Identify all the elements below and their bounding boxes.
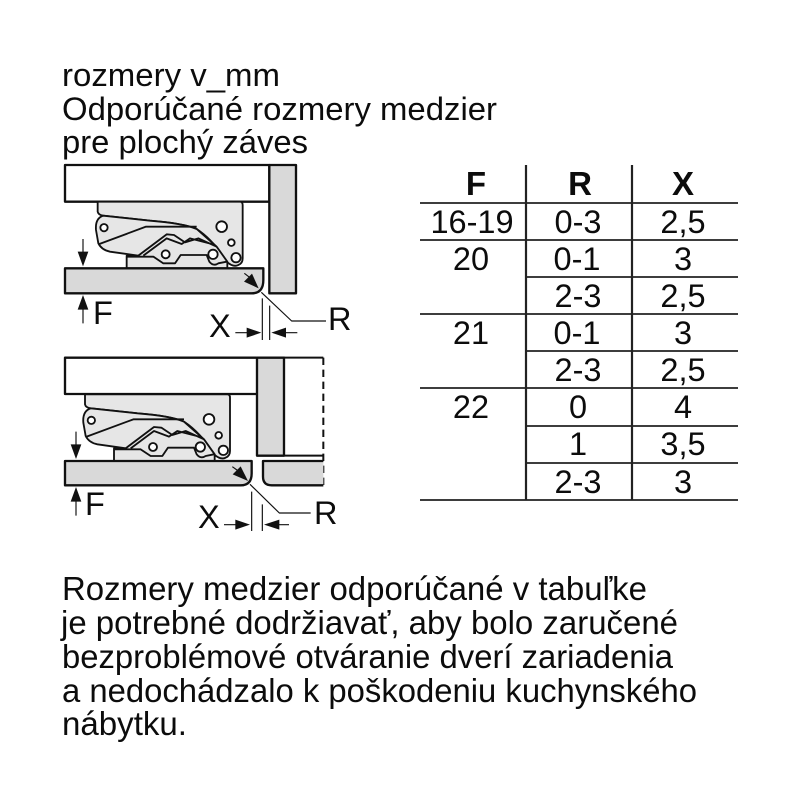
column R: 2-3 (555, 352, 601, 388)
dashed neighbour (284, 358, 323, 456)
door (65, 268, 263, 293)
table header: X (672, 165, 694, 202)
cabinet top (65, 358, 257, 394)
table header: R (568, 165, 592, 202)
column F: 20 (453, 241, 489, 277)
hinge (83, 394, 230, 461)
X dimension (224, 492, 289, 531)
column X: 2,5 (660, 278, 706, 314)
column F: 16-19 (430, 204, 514, 240)
column R: 0-1 (554, 241, 600, 277)
column R (554, 204, 601, 500)
label R: R (328, 301, 351, 337)
note text: nábytku. (62, 705, 187, 742)
column X: 4 (674, 389, 692, 425)
note text: bezproblémové otváranie dverí zariadenia (62, 638, 674, 675)
column R: 0-3 (555, 204, 601, 240)
diagram: flat hinge with side panel (65, 165, 326, 340)
note text: a nedochádzalo k poškodeniu kuchynského (62, 672, 697, 709)
neighbouring door (263, 461, 323, 485)
hinge (96, 202, 243, 268)
column R: 2-3 (555, 464, 601, 500)
column F: 22 (453, 389, 489, 425)
column X: 3 (674, 241, 692, 277)
label X: X (209, 308, 231, 344)
dimension table (420, 165, 738, 500)
heading (62, 57, 497, 160)
column X: 3 (674, 464, 692, 500)
table header (466, 165, 694, 202)
note text: Rozmery medzier odporúčané v tabuľke (62, 570, 647, 607)
note text: je potrebné dodržiavať, aby bolo zaručené (60, 604, 678, 641)
label F: F (93, 295, 113, 331)
column X: 3,5 (660, 426, 706, 462)
diagram: flat hinge with adjacent door (65, 358, 323, 531)
R leader (244, 273, 326, 321)
label R: R (314, 495, 337, 531)
column R: 0 (569, 389, 587, 425)
heading: Odporúčané rozmery medzier (62, 91, 497, 127)
X dimension (235, 298, 297, 340)
door (65, 461, 252, 485)
column R: 1 (569, 426, 587, 462)
column R: 0-1 (554, 315, 600, 351)
column X: 2,5 (660, 204, 706, 240)
column R: 2-3 (555, 278, 601, 314)
column F: 21 (453, 315, 489, 351)
column F (430, 204, 514, 425)
F dimension arrows (71, 432, 81, 516)
note text (60, 570, 697, 742)
side panel (257, 358, 284, 456)
side panel (269, 165, 296, 293)
table header: F (466, 165, 486, 202)
cabinet top (65, 165, 269, 202)
label F: F (85, 486, 105, 522)
R leader (232, 466, 311, 513)
heading: pre plochý záves (62, 124, 308, 160)
label X: X (198, 499, 220, 535)
column X: 3 (674, 315, 692, 351)
column X: 2,5 (660, 352, 706, 388)
column X (660, 204, 706, 500)
F dimension arrows (78, 239, 88, 323)
heading: rozmery v_mm (62, 57, 280, 93)
